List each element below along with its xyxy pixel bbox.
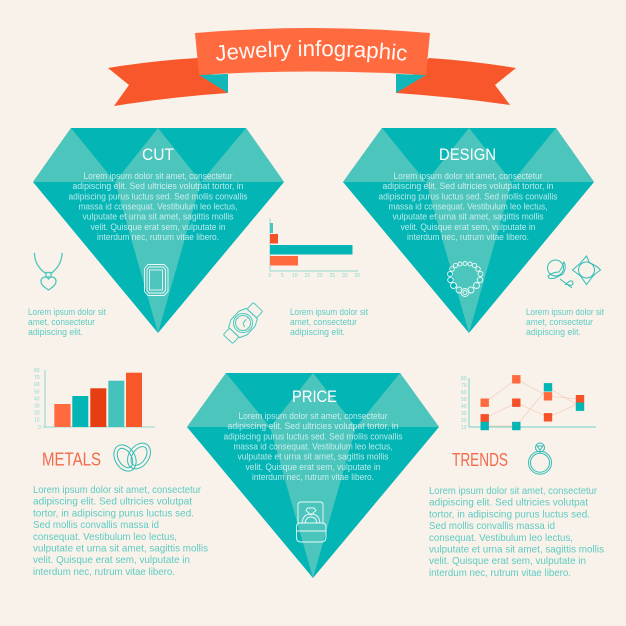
caption: earrings [526,307,604,337]
text block: design: velit. Quisque erat sem, vulputate in [400,222,536,232]
text block: cut: adipiscing purus luctus sed. Sed mollis convallis [68,191,248,201]
icon: diamond ring [528,443,552,474]
text block: design: interdum nec, rutrum vitae libero. [407,232,529,242]
heading: design: DESIGN [439,146,496,164]
text block: trends: interdum nec, rutrum vitae libero. [429,568,571,579]
heading: cut: CUT [142,146,174,164]
axis labels: 70 [461,383,467,389]
chart: metals bars [34,368,155,431]
title: Jewelry infographic [216,40,407,62]
chart: trends [461,375,596,431]
caption: watch: Lorem ipsum dolor sit [290,307,368,317]
panel: design [343,128,594,333]
axis labels: 20 [461,418,467,424]
caption: necklace: adipiscing elit. [28,327,83,337]
text block: trends: adipiscing elit. Sed ultricies volutpat [429,498,588,509]
chart: horizontal bars [268,218,360,279]
axis labels: 5 [281,273,284,279]
text block: design: adipiscing elit. Sed ultricies volutpat tortor, in [382,181,554,191]
text block: metals: tortor, in adipiscing purus luctus sed. [33,508,194,519]
text block: price: velit. Quisque erat sem, vulputate in [246,462,381,472]
text block: trends: consequat. Vestibulum leo lectus, [429,533,573,544]
text block: trends: Lorem ipsum dolor sit amet, consectetur [429,486,598,497]
text block: design: vulputate et urna sit amet, sagittis mollis [392,212,544,222]
text block: price: interdum nec, rutrum vitae libero. [252,472,374,482]
axis labels: 35 [354,273,360,279]
diamond [343,128,594,333]
caption: watch: amet, consectetur [290,317,357,327]
text block: trends [429,486,604,579]
caption: necklace: Lorem ipsum dolor sit [28,307,106,317]
text block: design: adipiscing purus luctus sed. Sed mollis convallis [378,191,558,201]
text block: trends: vulputate et urna sit amet, sagittis mollis [429,544,604,556]
text block: cut: massa id consequat. Vestibulum leo lectus, [78,202,238,212]
axis labels: 20 [317,273,323,279]
text block: price: Lorem ipsum dolor sit amet, consectetur [238,411,388,421]
text block: metals: interdum nec, rutrum vitae libero. [33,567,175,578]
heading: metals: METALS [42,450,101,470]
axis labels [34,368,41,431]
diamond [187,373,439,578]
axis labels: 10 [292,273,298,279]
icon: pearl necklace [448,262,483,296]
axis labels: 30 [34,404,40,410]
axis labels: 40 [34,396,40,402]
axis labels: 40 [461,404,467,410]
diamond [33,128,284,333]
axis labels: 50 [34,390,40,396]
caption: necklace: amet, consectetur [28,317,95,327]
axis labels: 20 [34,410,40,416]
axis labels: 25 [330,273,335,279]
banner [108,28,516,106]
text block: cut: velit. Quisque erat sem, vulputate in [90,222,226,232]
panel: price [187,373,439,578]
caption: watch: adipiscing elit. [290,327,345,337]
text block: cut [68,171,248,242]
text block: design: Lorem ipsum dolor sit amet, consectetur [394,171,543,181]
text block: price [224,411,403,482]
axis labels: 15 [304,273,310,279]
text block: design: massa id consequat. Vestibulum leo lectus, [388,202,548,212]
caption: watch [290,307,368,337]
icon: earrings and gem [548,256,600,288]
icon: emerald cut gem [144,264,168,296]
text block: metals: consequat. Vestibulum leo lectus, [33,532,177,543]
text block: metals: Sed mollis convallis massa id [33,520,159,531]
heading: price: PRICE [292,388,337,406]
icon: heart necklace [34,253,62,290]
axis labels: 60 [34,382,40,388]
text block: trends: Sed mollis convallis massa id [429,521,555,532]
text block: cut: Lorem ipsum dolor sit amet, consectetur [84,171,233,181]
heading: trends: TRENDS [452,450,508,470]
axis labels [268,273,360,279]
axis labels: 70 [34,375,40,381]
axis labels: 30 [342,273,348,279]
text block: price: vulputate et urna sit amet, sagittis mollis [238,452,389,462]
icon: ring box [296,502,326,542]
axis labels: 30 [461,411,467,417]
text block: metals [33,485,208,578]
text block: metals: adipiscing elit. Sed ultricies volutpat [33,497,192,508]
caption: earrings: adipiscing elit. [526,327,581,337]
text block: cut: vulputate et urna sit amet, sagittis mollis [82,212,234,222]
caption: earrings: Lorem ipsum dolor sit [526,307,604,317]
text block: cut: interdum nec, rutrum vitae libero. [97,232,219,242]
axis labels: 80 [461,376,467,382]
text block: metals: vulputate et urna sit amet, sagittis mollis [33,544,208,554]
panel: cut [33,128,284,333]
icon: wedding rings [109,439,155,475]
text block: price: massa id consequat. Vestibulum leo lectus, [234,442,392,452]
text block: metals: velit. Quisque erat sem, vulputate in [33,555,190,566]
text block: price: adipiscing purus luctus sed. Sed mollis convallis [224,431,403,441]
axis labels: 0 [268,273,272,279]
icon: wristwatch [220,299,266,347]
axis labels: 0 [38,425,41,431]
axis labels [461,376,467,431]
text block: design [378,171,558,242]
axis labels: 50 [461,397,467,403]
text block: trends: velit. Quisque erat sem, vulputate in [429,556,586,567]
text block: metals: Lorem ipsum dolor sit amet, consectetur [33,485,202,496]
text block: cut: adipiscing elit. Sed ultricies volutpat tortor, in [72,181,244,191]
caption: earrings: amet, consectetur [526,317,593,327]
text block: price: adipiscing elit. Sed ultricies volutpat tortor, in [228,421,399,431]
axis labels: 10 [461,425,467,431]
text block: trends: tortor, in adipiscing purus luctus sed. [429,509,590,520]
axis labels: 80 [34,368,40,374]
axis labels: 60 [461,390,467,396]
axis labels: 10 [34,418,40,424]
caption: necklace [28,307,106,337]
